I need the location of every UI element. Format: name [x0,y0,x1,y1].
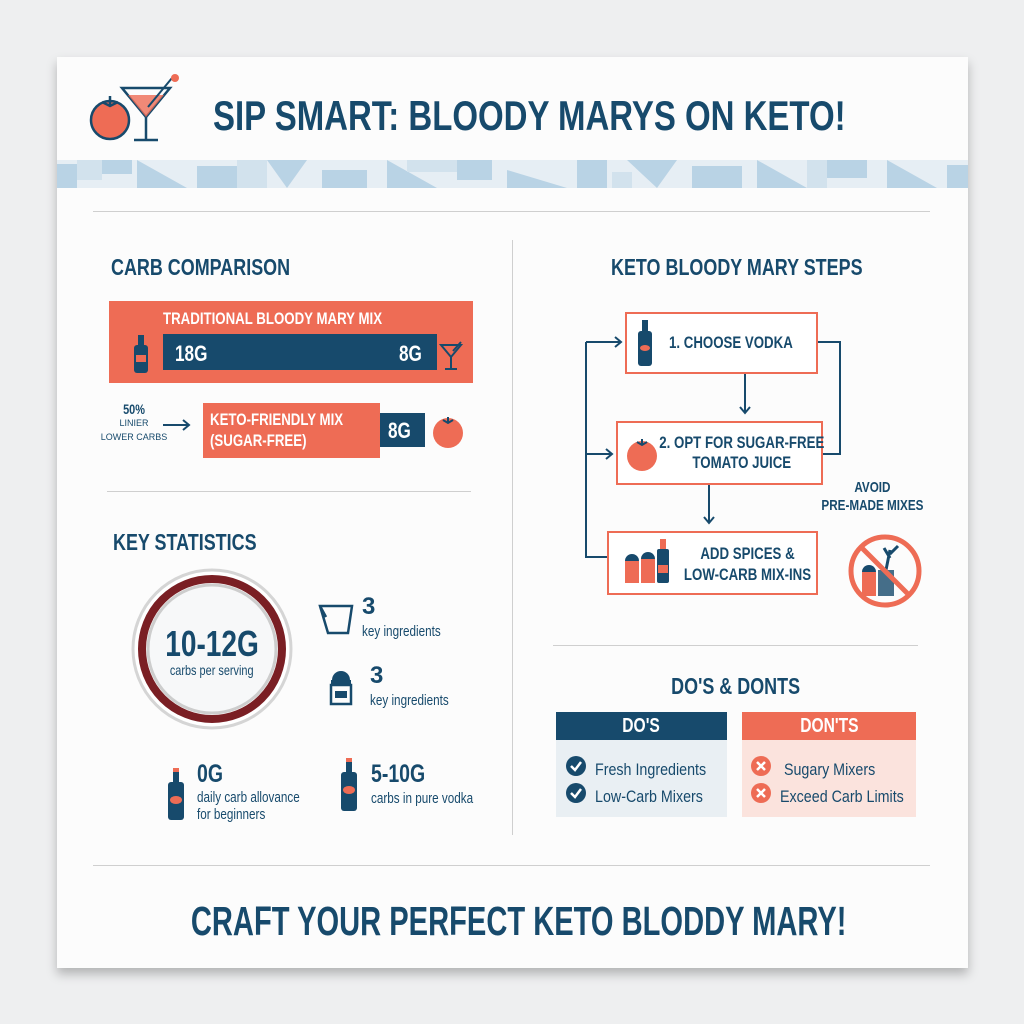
bar 18G [163,334,437,370]
callout: 50% lower carbs: LINIER [119,418,148,428]
panel: don'ts: Sugary Mixers [784,760,875,779]
stat: 5-10G carbs in pure vodka [341,758,474,811]
heading: key statistics: KEY STATISTICS [113,529,257,555]
arrow [163,419,190,431]
panel: keto-friendly mix bar: KETO-FRIENDLY MIX [210,410,343,429]
panel: do's: Fresh Ingredients [595,760,706,779]
stat: shaker 3 key ingredients [330,662,449,709]
stat: cup 3 key ingredients: 3 [362,593,375,620]
callout: 50% lower carbs: 50% [123,401,145,417]
panel: do's [556,712,727,817]
icon: no pre-made mixes [848,534,922,608]
callout: 50% lower carbs [101,401,167,442]
heading: keto bloody mary steps: KETO BLOODY MARY STEPS [611,254,863,280]
step 3 [607,531,818,595]
step 3: ADD SPICES & [701,544,795,563]
step 2: 2. OPT FOR SUGAR-FREE [659,433,825,452]
step 3: LOW-CARB MIX-INS [684,565,812,584]
stat: 5-10G carbs in pure vodka: 5-10G [371,760,425,788]
step 1 [625,312,818,374]
bar 18G: 8G [399,341,422,366]
footer tagline: CRAFT YOUR PERFECT KETO BLODDY MARY! [191,898,846,944]
callout: 50% lower carbs: LOWER CARBS [101,432,167,442]
stat: 0G daily carb allowance: daily carb allovance [197,789,300,806]
stat circle: 10-12G [132,568,292,730]
panel: don'ts: DON'TS [800,715,858,737]
title: SIP SMART: BLOODY MARYS ON KETO! [213,92,846,139]
step 2 [616,421,823,485]
icon: glass [439,341,463,370]
stat: cup 3 key ingredients: key ingredients [362,623,441,640]
callout: avoid pre-made mixes [821,479,923,514]
heading: carb comparison: CARB COMPARISON [111,254,290,280]
step 1: 1. CHOOSE VODKA [669,333,793,352]
stat circle: 10-12G: carbs per serving [170,662,254,678]
icon: tomato [433,417,463,448]
callout: avoid pre-made mixes: PRE-MADE MIXES [821,497,923,514]
bar 18G: 18G [175,341,207,366]
stat: shaker 3 key ingredients: 3 [370,662,383,689]
stat: 5-10G carbs in pure vodka: carbs in pure vodka [371,790,473,807]
header icon: tomato and cocktail glass [90,74,179,142]
panel: keto-friendly mix bar: 8G [388,418,411,443]
panel: don'ts: Exceed Carb Limits [780,787,904,806]
panel: do's: Low-Carb Mixers [595,787,703,806]
step 2: TOMATO JUICE [693,453,791,472]
stat: cup 3 key ingredients [318,593,441,640]
panel: traditional mix bar: TRADITIONAL BLOODY MARY MIX [163,309,382,328]
stat: shaker 3 key ingredients: key ingredients [370,692,449,709]
panel: don'ts [742,712,916,817]
icon: bottle [134,335,148,373]
panel: traditional mix bar [109,301,473,383]
decorative pattern band [57,160,968,188]
stat circle: 10-12G: 10-12G [165,623,259,664]
panel: do's: DO'S [623,715,660,737]
panel: keto-friendly mix bar: (SUGAR-FREE) [210,431,307,450]
heading: do's & donts: DO'S & DONTS [671,673,800,699]
panel: keto-friendly mix bar [203,403,463,458]
flow arrows [585,336,841,558]
stat: 0G daily carb allowance: 0G [197,760,223,788]
stat: 0G daily carb allowance [168,760,300,823]
stat: 0G daily carb allowance: for beginners [197,806,265,823]
callout: avoid pre-made mixes: AVOID [854,479,890,496]
card [57,57,968,968]
